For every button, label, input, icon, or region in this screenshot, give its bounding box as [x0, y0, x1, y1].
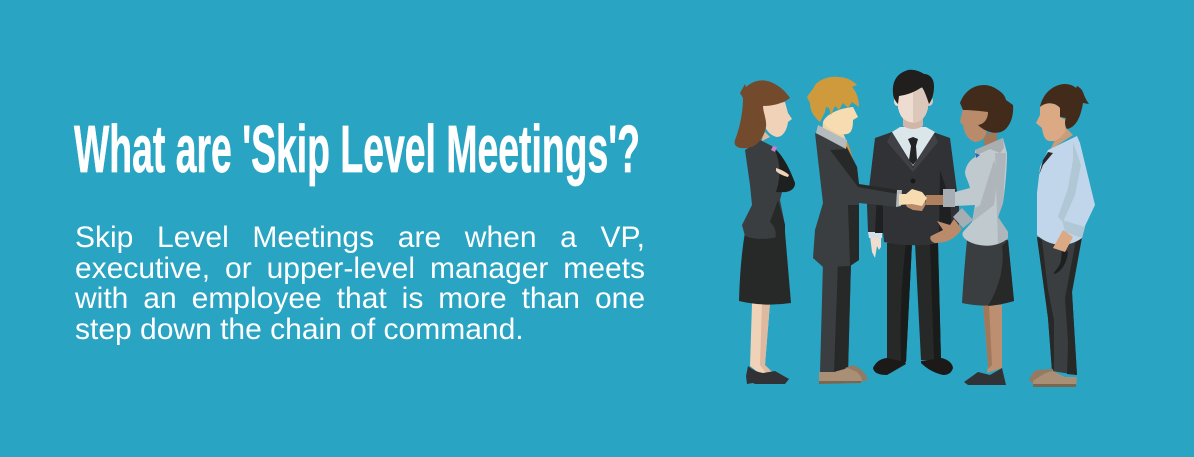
cuff — [868, 232, 882, 238]
legs — [750, 303, 772, 374]
face — [898, 88, 928, 122]
tie — [1039, 152, 1053, 175]
shirt — [1037, 136, 1095, 245]
shoes — [1029, 369, 1055, 384]
figure: woman with arms crossed — [735, 80, 795, 384]
ear — [925, 96, 933, 106]
forearm — [926, 195, 945, 205]
face — [960, 108, 990, 142]
lapels — [887, 132, 938, 172]
neck — [983, 132, 997, 152]
hair — [893, 70, 934, 104]
hand left — [870, 236, 881, 258]
figure: man in light blue shirt — [1029, 84, 1095, 387]
figure: woman in grey blouse — [926, 85, 1014, 385]
hand in pocket — [1053, 230, 1073, 252]
trousers — [1037, 237, 1082, 375]
neck — [1050, 127, 1073, 150]
text block: definition: executive, or upper-level manager meets — [75, 252, 645, 284]
collar — [975, 138, 1004, 155]
figure: man in suit, centre — [867, 70, 959, 375]
cuff — [896, 190, 902, 207]
neck — [903, 116, 923, 129]
collar — [816, 125, 847, 149]
hand on arm — [930, 219, 962, 243]
hair — [735, 80, 790, 148]
face — [823, 107, 858, 134]
button — [910, 178, 916, 184]
icon: handshake — [899, 189, 927, 211]
shirt and tie — [835, 132, 855, 165]
brooch — [975, 153, 980, 158]
hair — [807, 77, 859, 122]
shoes — [845, 365, 868, 381]
skirt — [739, 232, 791, 305]
hair — [960, 85, 1013, 133]
figure: blond man shaking hands — [807, 77, 902, 384]
sleeve cuffs — [943, 189, 955, 207]
face — [762, 102, 792, 137]
trousers — [887, 243, 912, 362]
shirt — [892, 127, 935, 166]
skirt — [962, 240, 1014, 306]
neck — [762, 130, 770, 141]
jacket — [742, 140, 795, 239]
ear — [1063, 108, 1071, 118]
shoe — [746, 366, 789, 384]
shoes — [964, 368, 1006, 385]
hand on arm — [776, 168, 789, 177]
blouse — [955, 138, 1008, 246]
trousers — [820, 262, 851, 373]
legs — [983, 305, 1002, 373]
text block: definition: with an employee that is more than one — [75, 282, 645, 315]
tie — [908, 137, 918, 165]
neck — [822, 122, 847, 142]
hair — [1040, 84, 1089, 129]
jacket — [813, 133, 898, 267]
text block: definition: step down the chain of command. — [75, 312, 524, 346]
text block: definition: Skip Level Meetings are when a VP, — [75, 221, 645, 254]
shoes — [873, 358, 906, 375]
face — [1036, 103, 1066, 141]
jacket — [867, 132, 959, 245]
text block: definition — [75, 221, 645, 346]
